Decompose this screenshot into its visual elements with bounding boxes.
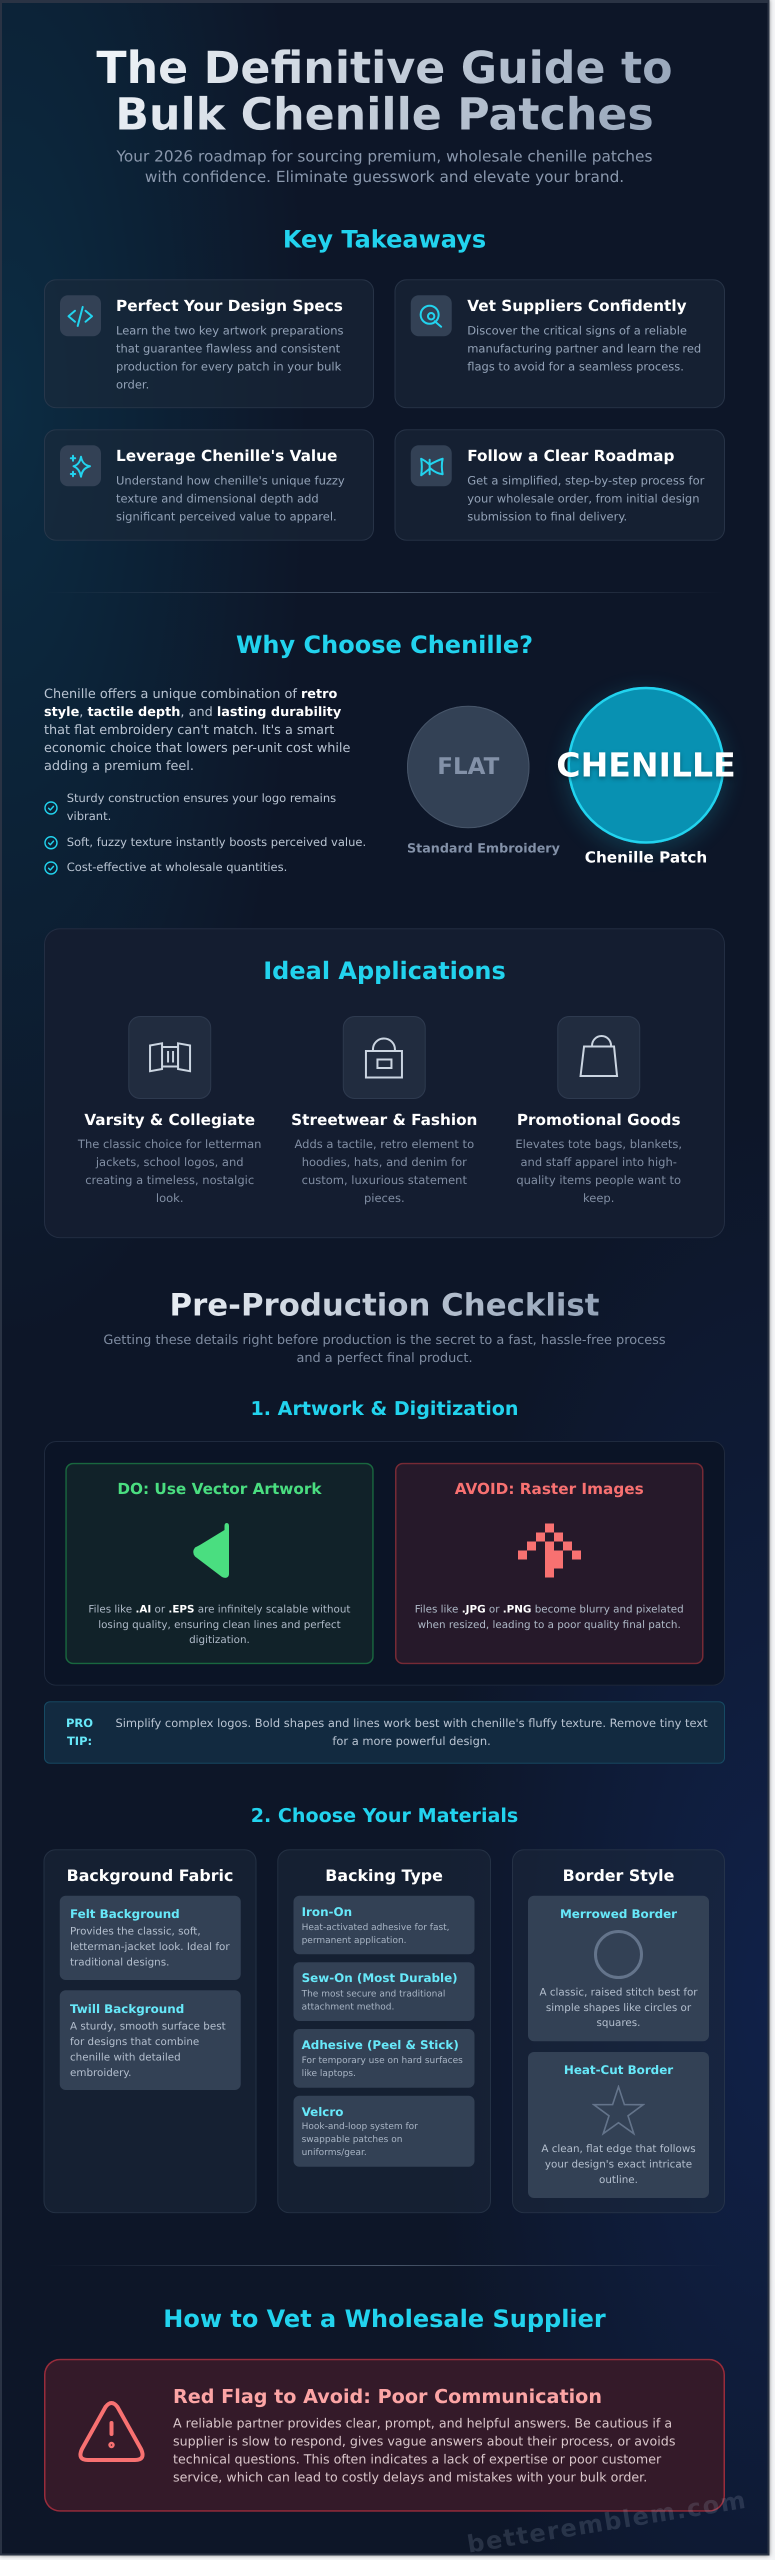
icon: code <box>60 295 101 336</box>
callout text <box>173 2414 675 2486</box>
option title: Adhesive (Peel & Stick) <box>302 2038 459 2052</box>
card: leverage chenille's value <box>44 429 374 541</box>
description: pieces. <box>364 1191 405 1204</box>
option title: Heat-Cut Border <box>564 2063 673 2077</box>
card text: losing quality, ensuring clean lines and perfect <box>98 1618 341 1630</box>
label: pro tip <box>66 1716 93 1748</box>
option title: Merrowed Border <box>560 1907 677 1921</box>
description <box>294 1137 474 1204</box>
option title: Felt Background <box>70 1907 180 1921</box>
description: Elevates tote bags, blankets, <box>515 1137 682 1150</box>
panel: ideal applications <box>44 928 725 1238</box>
option: heat-cut border <box>528 2052 709 2198</box>
option text <box>541 2142 696 2185</box>
heading: ideal applications: Ideal Applications <box>263 957 506 985</box>
icon: map <box>411 445 452 486</box>
title: Varsity & Collegiate <box>84 1111 255 1128</box>
callout text: technical questions. This often indicates a lack of expertise or poor customer <box>173 2452 661 2467</box>
card text: flags to avoid for a seamless process. <box>467 360 684 373</box>
option text: squares. <box>597 2017 640 2029</box>
description <box>515 1137 682 1204</box>
option text: Hook-and-loop system for <box>302 2121 418 2131</box>
card text <box>467 324 701 373</box>
icon: search <box>411 295 452 336</box>
column heading: Backing Type <box>325 1866 443 1884</box>
card: perfect your design specs <box>44 279 374 408</box>
label: standard embroidery: Standard Embroidery <box>407 840 560 855</box>
tip text <box>115 1716 708 1748</box>
option text: Provides the classic, soft, <box>70 1925 201 1937</box>
subtitle: Getting these details right before production is the secret to a fast, hassle-free process <box>103 1332 666 1347</box>
panel: backing type <box>277 1849 491 2213</box>
option: velcro <box>294 2096 475 2167</box>
card title: Vet Suppliers Confidently <box>467 297 687 314</box>
item: sturdy construction: Sturdy construction ensures your logo remains <box>67 791 336 805</box>
application: promotional <box>515 1016 682 1204</box>
item: soft texture: Soft, fuzzy texture instantly boosts perceived value. <box>67 835 366 848</box>
text: why chenille paragraph: style, tactile depth, and lasting durability <box>44 704 341 719</box>
description: custom, luxurious statement <box>302 1173 467 1186</box>
option text <box>70 2020 226 2078</box>
card text: order. <box>116 378 149 391</box>
heading: key takeaways: Key Takeaways <box>283 225 486 253</box>
card text: that guarantee flawless and consistent <box>116 342 340 355</box>
application: varsity <box>78 1016 261 1204</box>
tip text: Simplify complex logos. Bold shapes and lines work best with chenille's fluffy texture. Remove tiny text <box>115 1716 708 1730</box>
option text: like laptops. <box>302 2068 356 2078</box>
option text: A clean, flat edge that follows <box>541 2142 696 2154</box>
description: The classic choice for letterman <box>78 1137 261 1150</box>
label: pro tip: PRO <box>66 1716 93 1730</box>
callout text: service, which can lead to costly delays and mistakes with your bulk order. <box>173 2470 647 2485</box>
callout text: supplier is slow to respond, gives vague answers about their process, or avoids <box>173 2434 675 2449</box>
card text: significant perceived value to apparel. <box>116 510 337 523</box>
icon: smooth vector shape <box>193 1523 229 1578</box>
option: adhesive <box>294 2029 475 2088</box>
card text: when resized, leading to a poor quality final patch. <box>418 1618 681 1630</box>
heading: choose your materials: 2. Choose Your Materials <box>251 1804 518 1827</box>
option title: Sew-On (Most Durable) <box>302 1971 458 1985</box>
icon: pixelated shape <box>518 1524 581 1578</box>
option text: Heat-activated adhesive for fast, <box>302 1922 450 1932</box>
option title: Twill Background <box>70 2002 184 2016</box>
option text: permanent application. <box>302 1935 407 1945</box>
tip text: for a more powerful design. <box>332 1734 491 1748</box>
description: keep. <box>583 1191 614 1204</box>
card text <box>116 474 345 523</box>
description: jackets, school logos, and <box>96 1155 244 1168</box>
heading: artwork and digitization: 1. Artwork & Digitization <box>250 1397 519 1419</box>
card text: Learn the two key artwork preparations <box>116 324 343 337</box>
card text: manufacturing partner and learn the red <box>467 342 701 355</box>
checklist: chenille benefits <box>44 791 366 875</box>
card text: submission to final delivery. <box>467 510 627 523</box>
description: quality items people want to <box>516 1173 681 1186</box>
comparison: flat embroidery <box>407 706 560 856</box>
option: iron-on <box>294 1896 475 1954</box>
card text: production for every patch in your bulk <box>116 360 341 373</box>
subtitle: Your 2026 roadmap for sourcing premium, wholesale chenille patches <box>117 147 652 165</box>
callout text: A reliable partner provides clear, prompt, and helpful answers. Be cautious if a <box>173 2416 672 2431</box>
option: merrowed border <box>528 1896 709 2041</box>
callout: pro tip <box>44 1701 725 1764</box>
icon: varsity jacket <box>128 1016 211 1099</box>
text: why chenille paragraph <box>44 686 350 773</box>
card text <box>88 1603 350 1646</box>
title: Promotional Goods <box>517 1111 681 1128</box>
option text: chenille with detailed <box>70 2051 181 2063</box>
text: why chenille paragraph: that flat embroidery can't match. It's a smart <box>44 722 334 737</box>
section intro: pre-production checklist <box>103 1287 666 1365</box>
option text: The most secure and traditional <box>302 1988 445 1999</box>
option text: your design's exact intricate <box>545 2158 692 2170</box>
option text <box>302 1988 445 2012</box>
card title: Leverage Chenille's Value <box>116 447 337 464</box>
option title: Iron-On <box>302 1905 352 1919</box>
description <box>78 1137 261 1204</box>
title: Bulk Chenille Patches <box>115 89 654 140</box>
option text <box>302 2121 418 2157</box>
subtitle: and a perfect final product. <box>296 1350 473 1365</box>
card text: Understand how chenille's unique fuzzy <box>116 474 345 487</box>
icon: star border <box>592 2085 645 2136</box>
title: Streetwear & Fashion <box>291 1111 477 1128</box>
card text: Get a simplified, step-by-step process for <box>467 474 704 487</box>
card text <box>415 1603 684 1630</box>
callout: red flag <box>44 2359 725 2512</box>
option text <box>302 2055 463 2078</box>
circle: flat <box>407 706 530 828</box>
icon: warning triangle <box>78 2401 145 2462</box>
panel: background fabric <box>44 1849 256 2213</box>
option text: traditional designs. <box>70 1956 169 1968</box>
description: creating a timeless, nostalgic <box>85 1173 254 1186</box>
card text: Discover the critical signs of a reliable <box>467 324 687 337</box>
header <box>96 42 673 186</box>
title: The Definitive Guide to <box>96 42 673 93</box>
card: vet suppliers confidently <box>394 279 725 408</box>
column heading: Border Style <box>563 1866 674 1884</box>
card text: Files like .AI or .EPS are infinitely scalable without <box>88 1603 350 1615</box>
card title: Perfect Your Design Specs <box>116 297 343 314</box>
comparison: chenille patch <box>556 685 736 866</box>
option text: For temporary use on hard surfaces <box>302 2055 463 2065</box>
option: felt background <box>60 1896 241 1980</box>
subtitle: with confidence. Eliminate guesswork and elevate your brand. <box>145 168 624 186</box>
option title: Velcro <box>302 2105 343 2119</box>
label: pro tip: TIP: <box>67 1734 92 1748</box>
label: chenille: CHENILLE <box>556 746 736 784</box>
option text: simple shapes like circles or <box>546 2001 691 2013</box>
option text <box>70 1925 230 1968</box>
text: why chenille paragraph: economic choice that lowers per-unit cost while <box>44 740 350 755</box>
card text <box>116 324 343 391</box>
option text: for designs that combine <box>70 2035 199 2047</box>
card title: AVOID: Raster Images <box>455 1480 644 1498</box>
description: and staff apparel into high- <box>520 1155 677 1168</box>
option text: A classic, raised stitch best for <box>539 1986 698 1998</box>
description: Adds a tactile, retro element to <box>294 1137 474 1150</box>
option: twill background <box>60 1990 241 2090</box>
option text <box>302 1922 450 1945</box>
panel: artwork do and avoid <box>44 1441 725 1686</box>
card text <box>467 474 704 523</box>
icon: tote <box>343 1016 426 1099</box>
heading: how to vet a wholesale supplier: How to Vet a Wholesale Supplier <box>163 2304 606 2332</box>
item: sturdy construction: vibrant. <box>67 809 111 823</box>
option: sew-on <box>294 1962 475 2021</box>
card: follow a clear roadmap <box>394 429 725 541</box>
option text: letterman-jacket look. Ideal for <box>70 1940 230 1952</box>
label: chenille patch: Chenille Patch <box>585 849 707 866</box>
description: hoodies, hats, and denim for <box>302 1155 467 1168</box>
label: flat: FLAT <box>437 753 499 780</box>
title <box>96 42 673 140</box>
card text: texture and dimensional depth add <box>116 492 319 505</box>
application: streetwear <box>291 1016 477 1204</box>
option text: A sturdy, smooth surface best <box>70 2020 226 2032</box>
heading: why choose chenille: Why Choose Chenille? <box>236 631 533 659</box>
subtitle <box>103 1332 666 1365</box>
option text: uniforms/gear. <box>302 2147 367 2157</box>
card: do use vector artwork <box>65 1463 374 1664</box>
card text: Files like .JPG or .PNG become blurry and pixelated <box>415 1603 684 1615</box>
option text: swappable patches on <box>302 2134 402 2144</box>
panel: border style <box>512 1849 725 2213</box>
text: why chenille paragraph: Chenille offers a unique combination of retro <box>44 686 337 701</box>
column heading: Background Fabric <box>67 1866 233 1884</box>
option text: outline. <box>599 2173 638 2185</box>
icon: circle border <box>594 1930 643 1979</box>
card: avoid raster images <box>395 1463 703 1664</box>
callout title: Red Flag to Avoid: Poor Communication <box>173 2385 602 2408</box>
item: cost effective: Cost-effective at wholesale quantities. <box>67 860 287 874</box>
icon: shopping bag <box>557 1016 640 1099</box>
item: sturdy construction <box>44 791 336 823</box>
card text: your wholesale order, from initial design <box>467 492 700 505</box>
text: why chenille paragraph: adding a premium feel. <box>44 758 194 773</box>
card title: Follow a Clear Roadmap <box>467 447 674 464</box>
icon: sparkles <box>60 445 101 486</box>
title: Pre-Production Checklist <box>170 1287 599 1323</box>
card title: DO: Use Vector Artwork <box>117 1480 322 1498</box>
option text: attachment method. <box>302 2001 394 2012</box>
description: look. <box>156 1191 183 1204</box>
option text: embroidery. <box>70 2066 131 2078</box>
option text <box>539 1986 698 2029</box>
circle: chenille <box>568 687 724 844</box>
panel: key takeaways cards <box>44 279 725 541</box>
card text: digitization. <box>189 1634 250 1646</box>
subtitle <box>116 147 652 186</box>
